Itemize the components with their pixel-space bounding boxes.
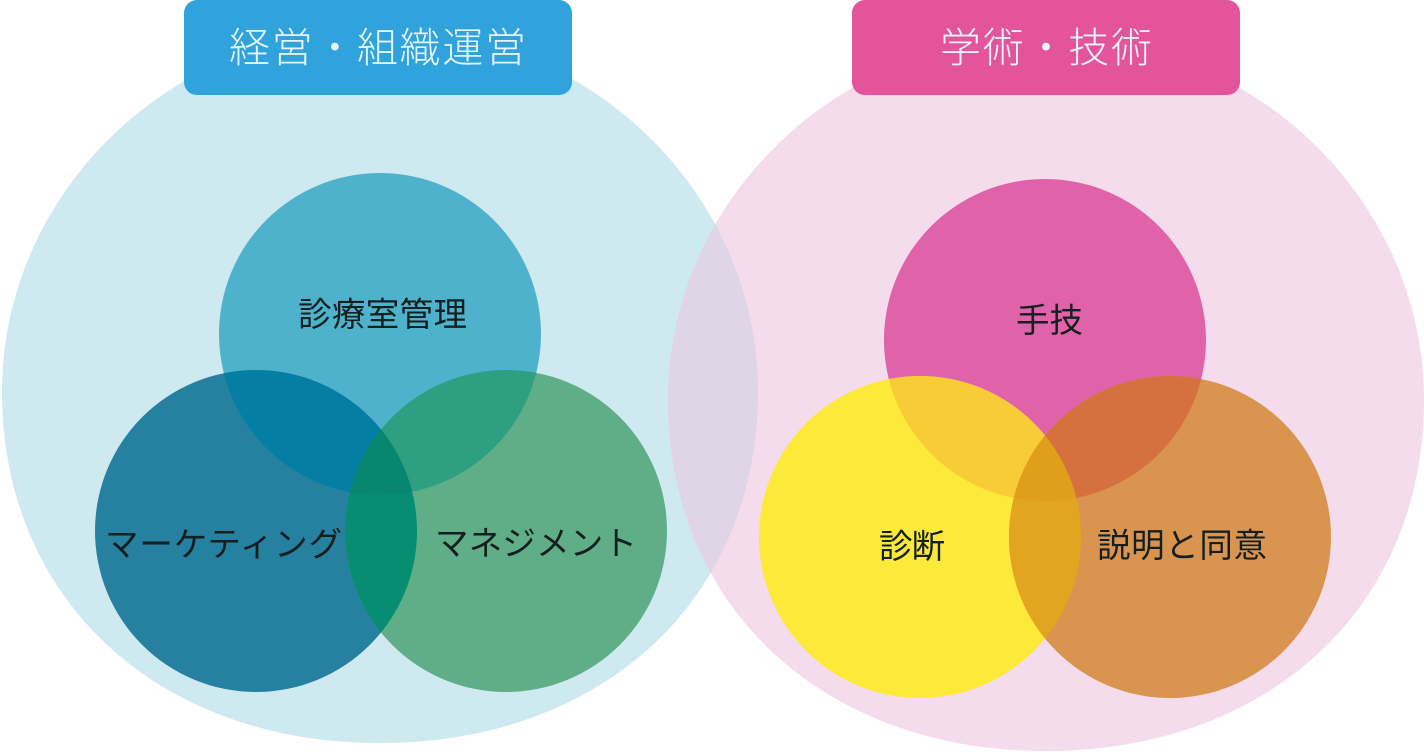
- overlap: diagnosis and consent: [1009, 436, 1081, 638]
- label: management skills: マネジメント: [435, 526, 637, 563]
- circle: manual technique: [884, 179, 1206, 501]
- panel: large circle academic: [668, 36, 1424, 751]
- circle: explanation and consent: [1009, 376, 1331, 698]
- header: management: [184, 0, 572, 95]
- circle: diagnosis: [759, 376, 1081, 698]
- circle: marketing: [95, 370, 417, 692]
- header: academic: [852, 0, 1240, 95]
- overlap of large circles: [668, 224, 758, 573]
- overlap: technique and consent: [1014, 376, 1201, 498]
- label: clinic management: 診療室管理: [298, 297, 467, 334]
- overlap: centre of management venn: [350, 430, 412, 490]
- panel: large circle management: [2, 28, 758, 743]
- label: explanation and consent: 説明と同意: [1097, 528, 1267, 565]
- overlap: centre of academic venn: [1014, 436, 1076, 497]
- overlap: clinic and marketing: [224, 370, 381, 492]
- overlap: technique and diagnosis: [889, 376, 1045, 498]
- overlap: clinic and management: [381, 370, 536, 492]
- label: marketing: マーケティング: [105, 527, 342, 564]
- header: management: 経営・組織運営: [229, 25, 526, 71]
- label: manual technique: 手技: [1016, 303, 1083, 340]
- label: diagnosis: 診断: [879, 529, 945, 566]
- circle: management skills: [345, 370, 667, 692]
- header: academic: 学術・技術: [940, 25, 1152, 71]
- group: management venn: [95, 173, 667, 692]
- circle: clinic management: [219, 173, 541, 495]
- overlap: marketing and management: [345, 431, 417, 632]
- group: academic venn: [759, 179, 1331, 698]
